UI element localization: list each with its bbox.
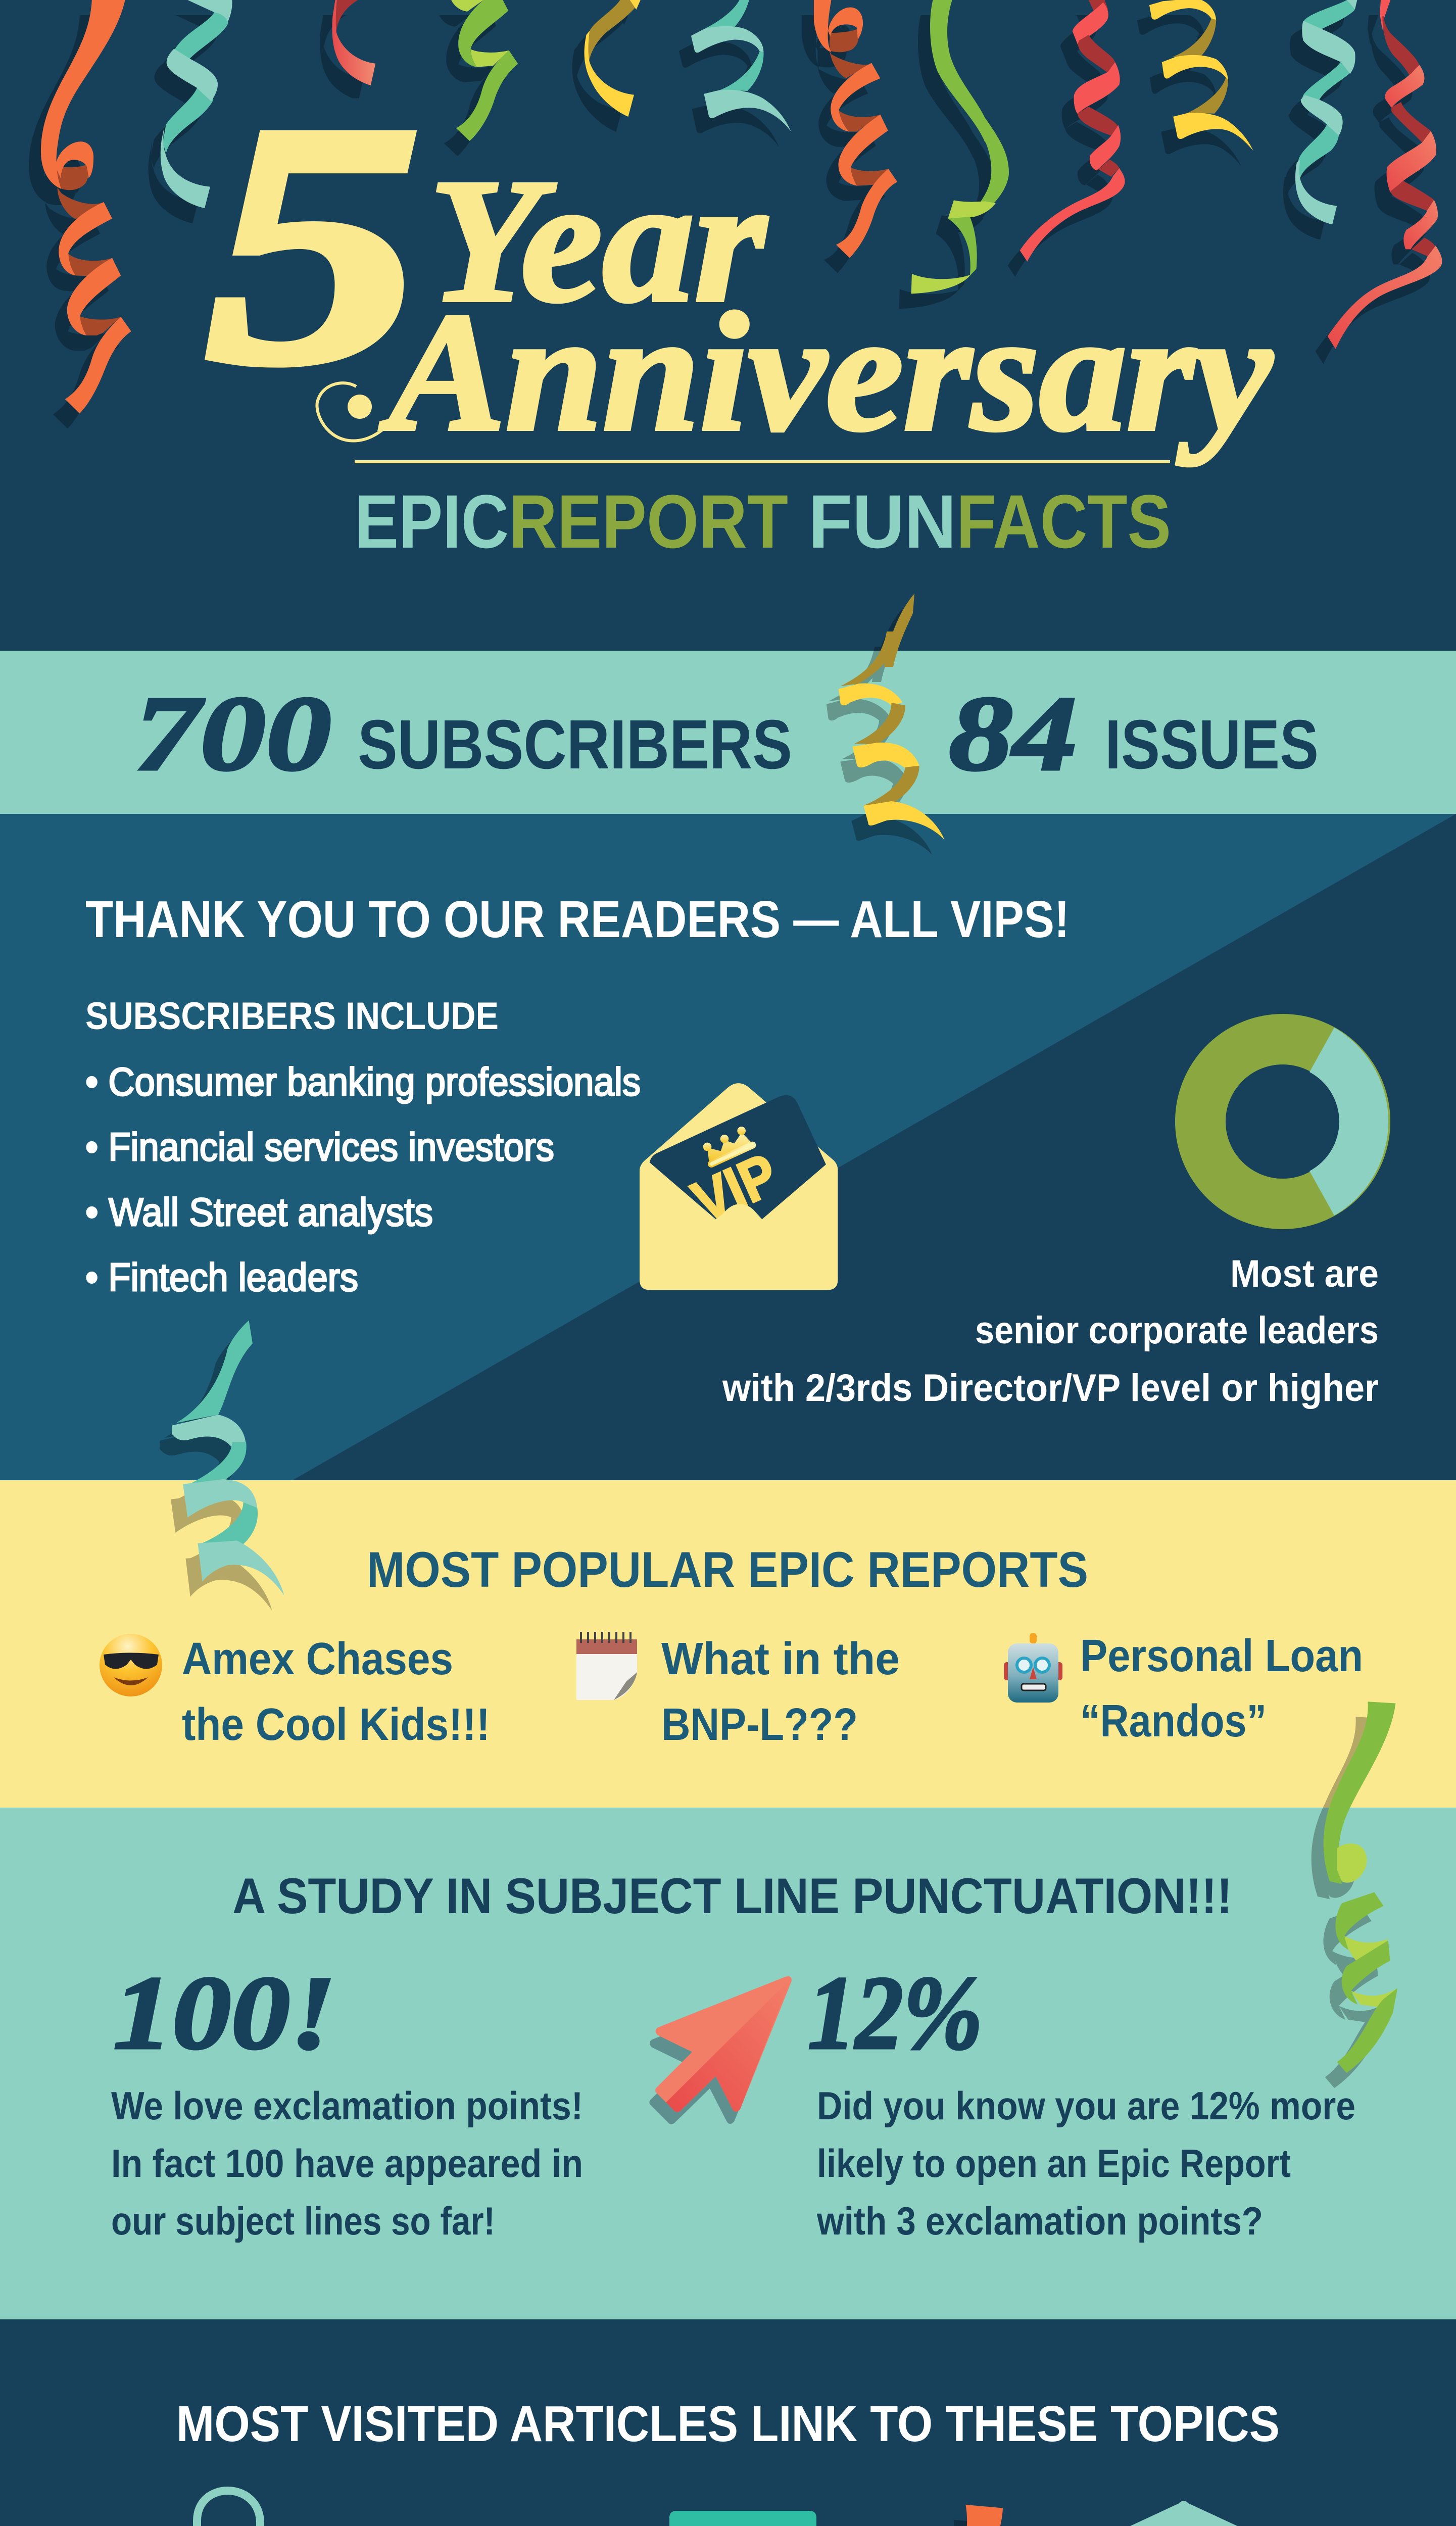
ribbon: teal right	[1295, 0, 1357, 224]
ribbon: teal crossing to yellow	[172, 1321, 284, 1595]
report: Amex: Amex Chases	[182, 1634, 453, 1684]
stat: 12 percent: 12%	[808, 1955, 983, 2071]
senior leaders note: with 2/3rds Director/VP level or higher	[722, 1367, 1379, 1410]
ribbon: red far right	[1328, 0, 1442, 349]
report: Amex: the Cool Kids!!!	[182, 1699, 490, 1750]
panel: header	[0, 0, 1456, 651]
heading: MOST VISITED ARTICLES LINK TO THESE TOPICS	[176, 2396, 1280, 2452]
text: open rate	[816, 2083, 1355, 2243]
stat: 100: 100!	[113, 1955, 336, 2071]
icon: VIP envelope: VIP	[683, 1141, 787, 1235]
text: exclamation points: In fact 100 have appeared in	[111, 2141, 583, 2185]
donut chart: two thirds director or VP	[1200, 1028, 1388, 1216]
text: open rate: likely to open an Epic Report	[817, 2141, 1291, 2185]
title: 5 Year Anniversary: 5	[206, 54, 421, 434]
heading: MOST POPULAR EPIC REPORTS	[367, 1541, 1088, 1597]
text: exclamation points: our subject lines so far!	[111, 2199, 495, 2243]
icon: shopping bag calendar	[156, 2491, 300, 2526]
ribbon: teal left	[161, 0, 232, 208]
panel: most popular epic reports	[0, 1480, 1456, 1808]
report: BNPL	[661, 1634, 900, 1750]
subscriber list	[85, 995, 641, 1299]
icon: credit cards	[638, 2511, 816, 2526]
ribbon: green long	[911, 0, 1009, 294]
ribbon: orange far left	[41, 0, 131, 413]
report: BNPL: BNP-L???	[661, 1699, 858, 1750]
subtitle	[355, 479, 1171, 564]
ribbon: center band yellow	[839, 594, 944, 840]
ribbon: red small	[332, 0, 375, 85]
subtitle: EPIC	[355, 479, 509, 564]
ribbon: orange topics	[919, 2505, 1006, 2526]
icon: cursor arrow	[649, 1976, 792, 2124]
report: Personal Loan: “Randos”	[1080, 1696, 1267, 1746]
ribbon: green crossing to teal	[1324, 1702, 1397, 2073]
report: BNPL: What in the	[661, 1634, 900, 1684]
subscriber list: SUBSCRIBERS INCLUDE	[85, 995, 499, 1038]
ribbon: teal curl	[691, 0, 791, 131]
ribbon: green short	[451, 0, 518, 141]
panel: most visited topics	[0, 2319, 1456, 2526]
ribbon: orange center top	[814, 0, 897, 258]
subscriber list: • Wall Street analysts	[85, 1190, 433, 1234]
icon: graduation cap	[1076, 2501, 1292, 2526]
panel: subscribers and issues band: SUBSCRIBERS	[358, 706, 792, 784]
subtitle: FUN	[808, 479, 956, 564]
subscriber list: • Financial services investors	[85, 1125, 554, 1169]
icon: robot emoji	[1004, 1633, 1062, 1703]
text: open rate: Did you know you are 12% more	[817, 2083, 1355, 2128]
report: Personal Loan	[1080, 1631, 1363, 1746]
title: 5 Year Anniversary	[206, 54, 1274, 466]
ribbon: yellow short	[585, 0, 641, 117]
ribbon: red right	[1020, 0, 1125, 262]
senior leaders note	[722, 1252, 1379, 1410]
subscriber list: • Fintech leaders	[85, 1255, 358, 1299]
panel: thank you readers	[0, 814, 1456, 1480]
subscriber list: • Consumer banking professionals	[85, 1059, 641, 1104]
panel: subscribers and issues band: ISSUES	[1105, 706, 1319, 784]
heading: THANK YOU TO OUR READERS — ALL VIPS!	[85, 890, 1070, 948]
text: exclamation points: We love exclamation points!	[111, 2083, 583, 2128]
subtitle: FACTS	[956, 479, 1171, 564]
panel: subscribers and issues band	[0, 651, 1456, 814]
title: 5 Year Anniversary: Year	[429, 142, 769, 338]
panel: subscribers and issues band: 84	[949, 674, 1077, 793]
subtitle: REPORT	[509, 479, 788, 564]
icon: calendar emoji	[576, 1632, 637, 1700]
icon: sunglasses emoji	[100, 1634, 162, 1696]
icon: VIP envelope	[640, 1083, 838, 1290]
panel: subject line punctuation	[0, 1808, 1456, 2319]
title: 5 Year Anniversary: Anniversary	[378, 278, 1274, 466]
report: Amex	[182, 1634, 490, 1750]
report: Personal Loan: Personal Loan	[1080, 1631, 1363, 1681]
senior leaders note: senior corporate leaders	[975, 1309, 1379, 1352]
senior leaders note: Most are	[1230, 1252, 1379, 1295]
text: open rate: with 3 exclamation points?	[816, 2199, 1263, 2243]
text: exclamation points	[111, 2083, 583, 2243]
heading: A STUDY IN SUBJECT LINE PUNCTUATION!!!	[232, 1868, 1232, 1924]
ribbon: yellow right	[1149, 0, 1253, 151]
panel: subscribers and issues band: 700	[134, 674, 331, 793]
